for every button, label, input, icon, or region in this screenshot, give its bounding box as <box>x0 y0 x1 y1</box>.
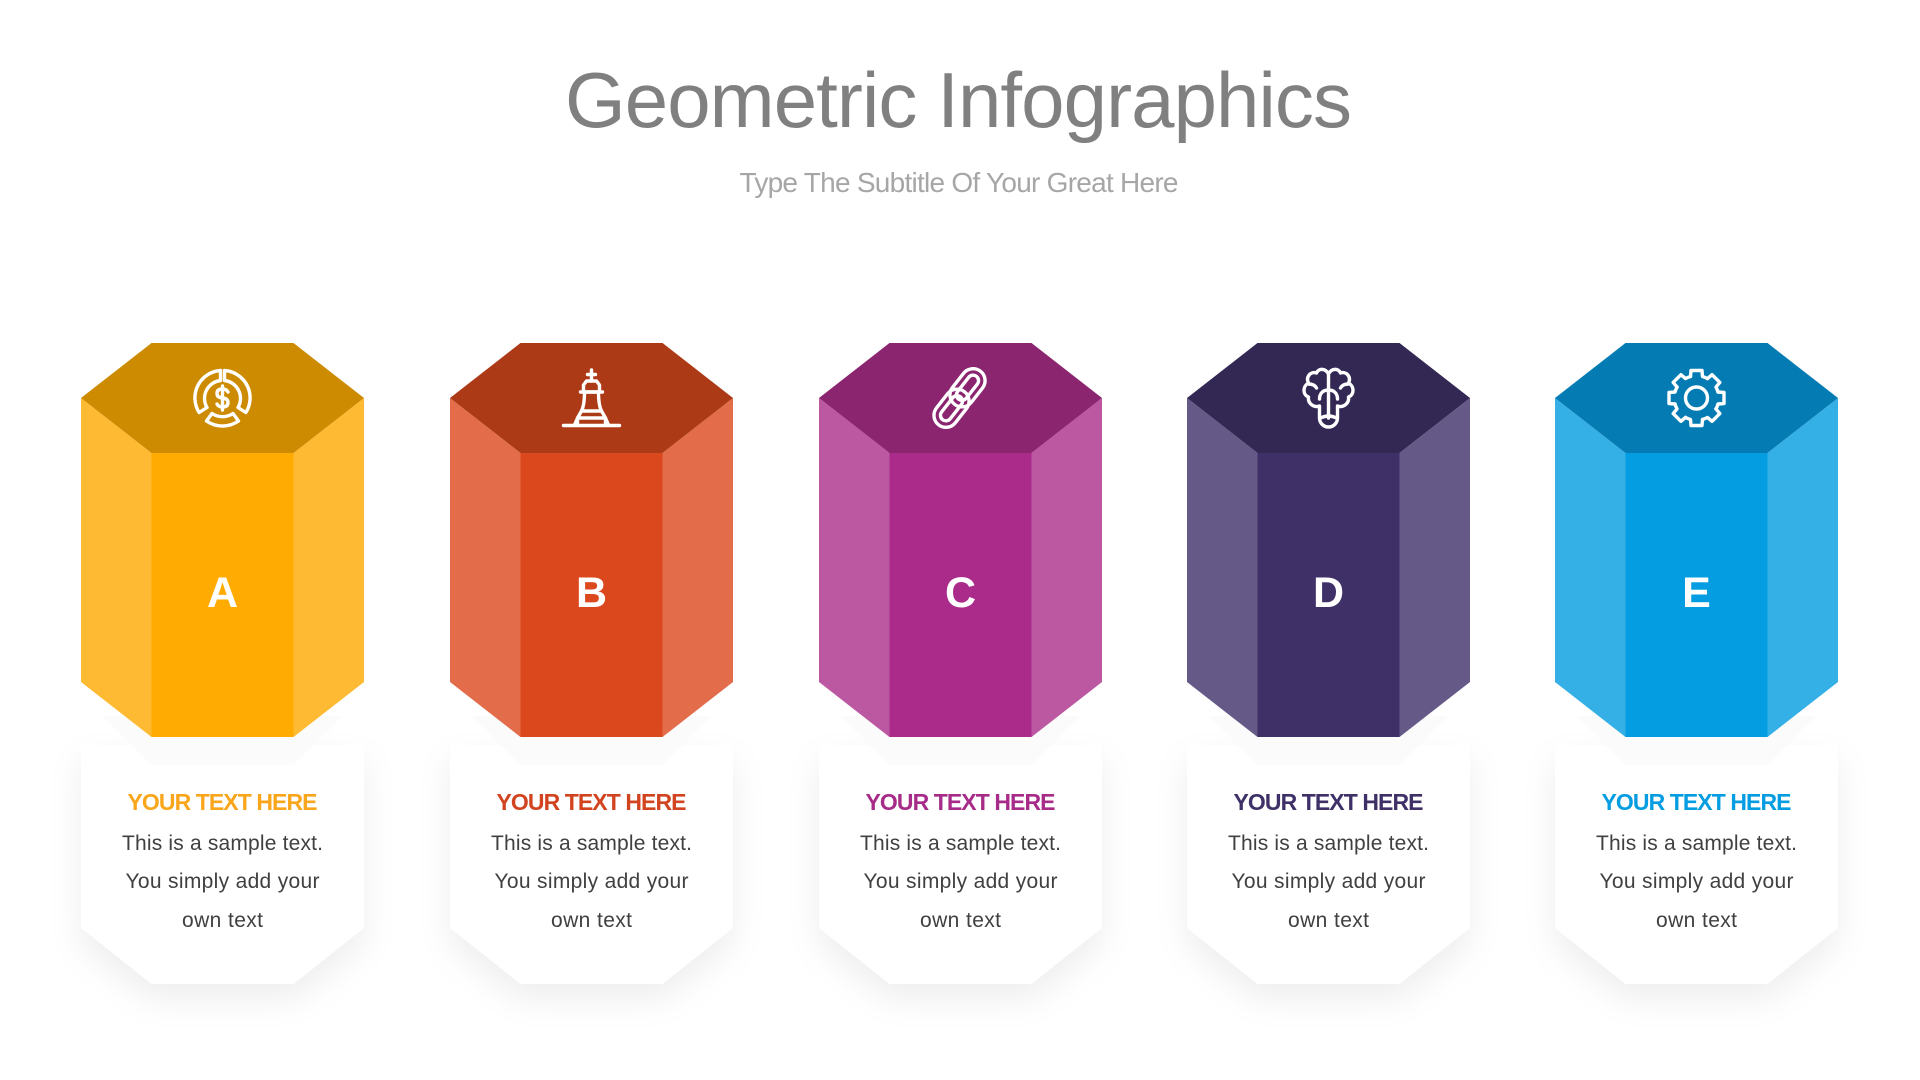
icon: chain link <box>929 364 990 432</box>
body text: You simply add your <box>126 870 320 893</box>
letter D: D <box>1313 569 1344 617</box>
panel: C <box>819 343 1102 984</box>
subtitle: Type The Subtitle Of Your Great Here <box>740 167 1178 198</box>
prism right face <box>662 398 733 737</box>
icon: gear <box>1669 370 1724 426</box>
prism front face <box>1258 453 1400 737</box>
icon: brain bulb <box>1304 369 1353 427</box>
prism left face <box>1187 398 1258 737</box>
text card <box>81 745 364 984</box>
icon: money pie <box>195 370 250 426</box>
prism shadow on card <box>1576 716 1816 765</box>
prism top <box>450 343 733 453</box>
body text: This is a sample text. <box>1596 832 1797 855</box>
panel: E <box>1555 343 1838 984</box>
text card <box>450 745 733 984</box>
body text: This is a sample text. <box>122 832 323 855</box>
prism right face <box>1768 398 1838 737</box>
panel: D <box>1187 343 1470 984</box>
prism front face <box>152 453 294 737</box>
prism left face <box>819 398 890 737</box>
letter E: E <box>1682 569 1711 617</box>
prism right face <box>1400 398 1470 737</box>
text card <box>1555 745 1838 984</box>
body text: own text <box>1656 909 1737 932</box>
body text <box>122 832 323 932</box>
text card <box>1187 745 1470 984</box>
prism right face <box>1032 398 1102 737</box>
prism shadow on card <box>840 716 1080 765</box>
body text <box>1228 832 1429 932</box>
title: Geometric Infographics <box>565 56 1352 144</box>
prism left face <box>1555 398 1626 737</box>
heading: YOUR TEXT HERE <box>866 789 1056 815</box>
body text: own text <box>182 909 263 932</box>
body text: This is a sample text. <box>860 832 1061 855</box>
body text: You simply add your <box>1600 870 1794 893</box>
letter C: C <box>945 569 976 617</box>
prism left face <box>81 398 152 737</box>
prism left face <box>450 398 520 737</box>
body text: You simply add your <box>864 870 1058 893</box>
heading: YOUR TEXT HERE <box>128 789 318 815</box>
text card <box>819 745 1102 984</box>
panel: B <box>450 343 733 984</box>
icon: chess king <box>564 370 620 426</box>
letter A: A <box>207 569 238 617</box>
body text <box>491 832 692 932</box>
prism top <box>1555 343 1838 453</box>
prism shadow on card <box>1208 716 1448 765</box>
prism right face <box>294 398 364 737</box>
body text <box>860 832 1061 932</box>
prism shadow on card <box>472 716 712 765</box>
body text: You simply add your <box>494 870 688 893</box>
panel: A <box>81 343 364 984</box>
prism top <box>81 343 364 453</box>
body text <box>1596 832 1797 932</box>
prism front face <box>1626 453 1768 737</box>
body text: own text <box>1288 909 1369 932</box>
letter B: B <box>576 569 607 617</box>
body text: This is a sample text. <box>1228 832 1429 855</box>
body text: own text <box>920 909 1001 932</box>
prism shadow on card <box>102 716 342 765</box>
body text: You simply add your <box>1232 870 1426 893</box>
prism top <box>1187 343 1470 453</box>
prism front face <box>520 453 662 737</box>
body text: own text <box>551 909 632 932</box>
heading: YOUR TEXT HERE <box>1602 789 1792 815</box>
prism front face <box>890 453 1032 737</box>
heading: YOUR TEXT HERE <box>1234 789 1424 815</box>
heading: YOUR TEXT HERE <box>496 789 686 815</box>
body text: This is a sample text. <box>491 832 692 855</box>
prism top <box>819 343 1102 453</box>
